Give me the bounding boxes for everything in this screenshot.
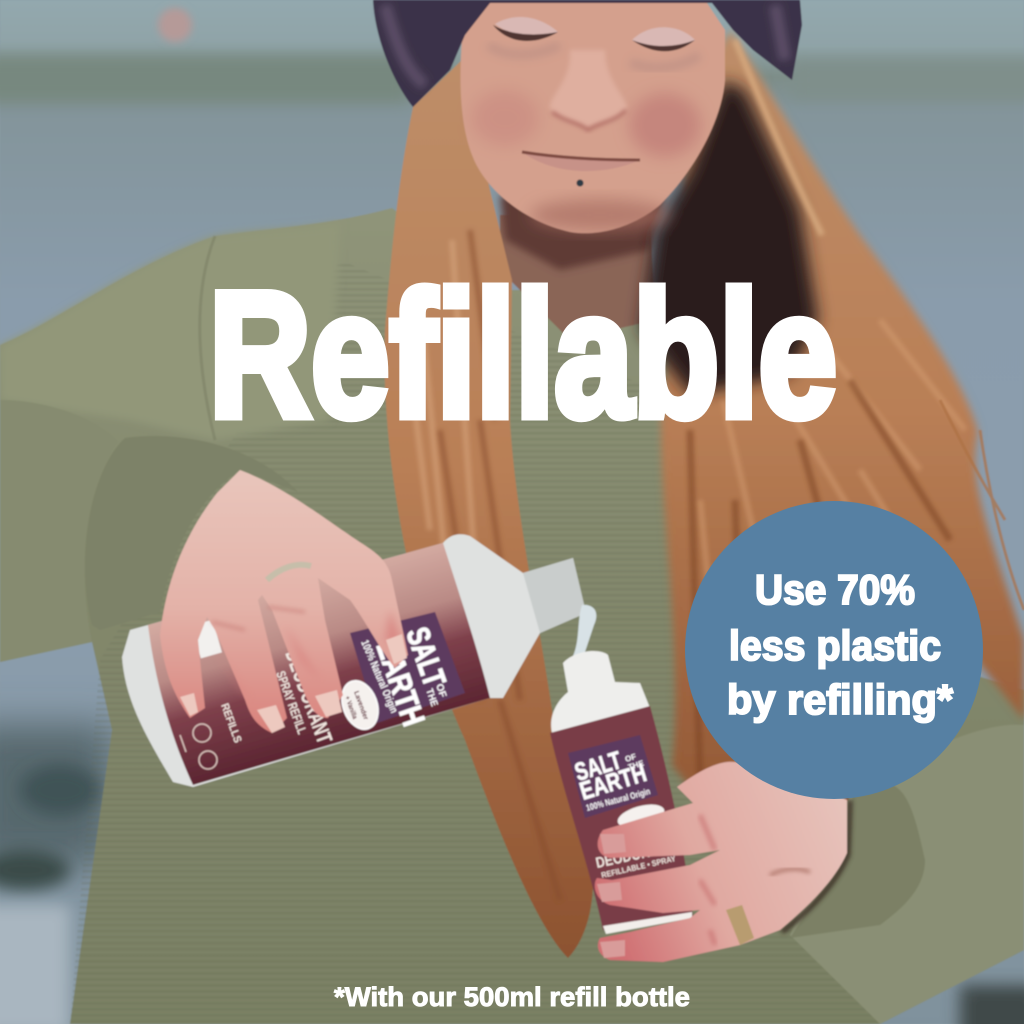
refill bottle purple label: OF [433, 682, 448, 699]
callout badge [685, 501, 983, 799]
barcode label [191, 620, 222, 658]
refill bottle: SPRAY REFILL [273, 669, 310, 736]
refill bottle purple label: SALT [399, 623, 453, 691]
small bottle [550, 651, 693, 934]
scent badge: + Vanilla [343, 695, 358, 720]
right hand [595, 762, 847, 962]
small bottle purple label [568, 735, 658, 818]
sweater body and left sleeve [0, 208, 1024, 1024]
eyes [493, 25, 558, 41]
refill bottle [122, 534, 586, 787]
eyelids [495, 17, 695, 49]
neck [500, 195, 665, 340]
mouth [522, 152, 640, 171]
small bottle scent badge [615, 800, 667, 832]
refill bottle purple label: EARTH [369, 636, 432, 730]
scent badge: Lavender [352, 690, 369, 721]
long hair left [384, 60, 593, 958]
right sleeve [782, 725, 1024, 1024]
refill bottle purple label: THE [423, 687, 440, 708]
title: Refillable [209, 255, 837, 454]
long hair right [640, 30, 1024, 870]
small bottle purple label: EARTH [577, 759, 650, 806]
fingernails [180, 634, 407, 733]
gold ring [726, 905, 754, 945]
water stream [573, 605, 596, 656]
small bottle purple label: OF [624, 752, 637, 764]
left hand [160, 470, 408, 733]
refill bottle product text: DEODORANT [280, 646, 337, 747]
refill bottle: REFILLS [218, 702, 243, 745]
small bottle purple label: THE [627, 758, 646, 772]
refill bottle purple label [350, 612, 465, 730]
ring [267, 565, 311, 580]
callout badge: less plastic [729, 622, 941, 669]
nose [550, 50, 627, 130]
small bottle purple label: 100% Natural Origin [585, 786, 651, 813]
nails [597, 834, 626, 958]
small bottle product text: DEODORANT [594, 839, 676, 872]
scent badge [335, 676, 385, 734]
face [460, 0, 725, 233]
small bottle: REFILLABLE • SPRAY [600, 854, 677, 880]
refill bottle purple label: 100% Natural Origin [358, 638, 400, 715]
callout badge: by refilling* [727, 676, 954, 723]
callout badge: Use 70% [755, 566, 915, 613]
certification icons [180, 724, 217, 769]
small bottle purple label: SALT [572, 746, 625, 787]
beanie hat [373, 0, 802, 107]
footnote: *With our 500ml refill bottle [334, 982, 690, 1012]
